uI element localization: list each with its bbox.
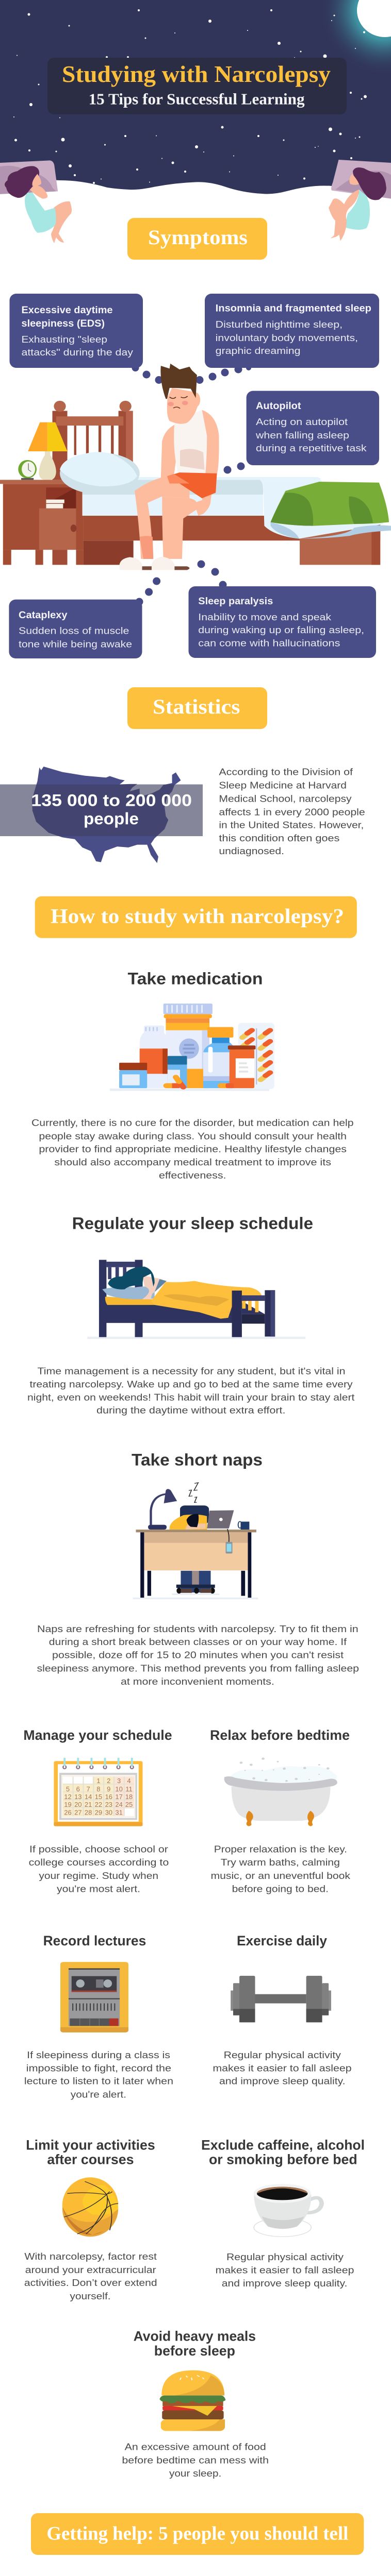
icon: calendar: 1 [96,1777,101,1785]
icon: calendar: 22 [95,1801,102,1808]
tip text: medication: Currently, there is no cure for the disorder, but medication can help [31,1117,354,1128]
illustration: medicine bottles [110,1004,274,1091]
tip title: limit activities: after courses [47,2151,134,2167]
callout: cataplexy: tone while being awake [19,638,132,649]
icon: tape recorder [60,1962,128,2032]
icon: calendar: 28 [85,1808,92,1817]
statistic band: 135 000 to 200 000 [31,791,192,810]
tip text: naps: during a short break between classes or on your way home. If [49,1636,347,1647]
tip title: relax before bedtime: Relax before bedtime [210,1727,350,1743]
heading: Statistics [127,687,267,729]
tip text: regulate sleep: night, even on weekends! This habit will train your brain to stay alert [27,1392,354,1403]
illustration: tired man on bed [0,364,391,570]
tip text: naps: possible, doze off for 15 to 20 minutes when you can't resist [52,1650,344,1660]
icon: dumbbell [231,1976,331,2022]
tip title: manage your schedule: Manage your schedule [23,1727,172,1743]
tip text: limit activities: With narcolepsy, factor rest [24,2251,157,2262]
tip text: relax [210,1844,351,1894]
statistics text: in the United States. However, [219,819,364,831]
tip text: regulate sleep [27,1365,354,1416]
icon: calendar [54,1758,143,1826]
icon: bathtub [224,1757,337,1826]
icon: calendar: 17 [115,1793,123,1801]
icon: calendar: 21 [85,1801,92,1808]
tip title: limit activities: Limit your activities [26,2137,155,2153]
tip text: record lectures [24,2049,173,2099]
callout: sleep paralysis: Inability to move and speak [198,612,332,622]
icon: calendar: 16 [105,1793,112,1801]
callout: sleep paralysis: Sleep paralysis [198,596,273,607]
statistics text: affects 1 in every 2000 people [219,807,365,817]
tip text: exercise [213,2049,352,2087]
tip text: exclude caffeine: and improve sleep quality. [222,2278,347,2289]
illustration: left sleeping girl [0,160,72,243]
thought bubble dots [132,364,251,606]
callout: insomnia: graphic dreaming [216,345,300,356]
callout: autopilot: Acting on autopilot [256,416,348,427]
icon: calendar: 6 [76,1785,80,1793]
tip text: limit activities: yourself. [70,2291,111,2301]
icon: calendar: 8 [96,1785,101,1793]
icon: calendar: 12 [64,1793,72,1801]
icon: calendar: 9 [107,1785,110,1793]
callout: autopilot: when falling asleep [255,430,349,440]
statistics text: According to the Division of [219,767,353,777]
callout: excessive daytime sleepiness: Excessive daytime [22,304,113,316]
callout: excessive daytime sleepiness: sleepiness (EDS) [22,318,105,329]
heading: getting help: Getting help: 5 people you should tell [46,2523,348,2544]
callout: insomnia [205,294,379,368]
tip text: record lectures: lecture to listen to it later when [24,2076,173,2087]
tip text: exclude caffeine [216,2251,354,2289]
callout: excessive daytime sleepiness [9,294,143,368]
tip text: record lectures: you're alert. [71,2089,126,2099]
heading: Symptoms: Symptoms [148,226,248,249]
callout: insomnia: Disturbed nighttime sleep, [216,319,343,330]
icon: burger [159,2370,225,2431]
icon: coffee cup [254,2184,322,2236]
icon: calendar: 19 [64,1801,72,1808]
header: night sky [0,0,391,194]
tip text: record lectures: If sleepiness during a class is [27,2049,170,2060]
tip text: limit activities: around your extracurricular [25,2264,156,2275]
tip text: exclude caffeine: Regular physical activity [226,2251,344,2262]
callout: sleep paralysis [189,586,376,658]
icon: calendar: 15 [95,1793,102,1801]
icon: calendar: 2 [107,1777,110,1785]
tip title: exclude caffeine: Exclude caffeine, alcohol [201,2137,365,2153]
callout: insomnia: involuntary body movements, [216,332,358,343]
tip text: medication: should also accompany medical treatment to improve its [54,1157,331,1167]
callout: autopilot: during a repetitive task [256,443,367,453]
illustration: right sleeping girl [329,160,391,241]
stars [13,9,367,184]
icon: calendar: 10 [115,1785,123,1793]
icon: calendar: 11 [125,1785,133,1793]
heading: Symptoms [127,218,267,260]
tip text: exercise: and improve sleep quality. [219,2076,346,2087]
icon: calendar: 3 [117,1777,121,1785]
heading: how to study: How to study with narcolepsy? [51,904,344,927]
icon: basketball [62,2177,118,2236]
tip text: avoid heavy meals: before bedtime can mess with [122,2454,269,2465]
icon: calendar: 14 [85,1793,92,1801]
title: Studying with Narcolepsy [62,61,331,87]
callout: autopilot: Autopilot [256,400,301,412]
icon: calendar: 31 [115,1808,123,1817]
tip text: manage schedule: your regime. Study when [39,1870,158,1881]
icon: calendar: 26 [64,1808,72,1817]
statistics text: Medical School, narcolepsy [219,793,352,804]
icon: calendar: 18 [125,1793,133,1801]
icon: calendar: 7 [86,1785,90,1793]
tip title: take medication: Take medication [128,969,263,988]
subtitle: 15 Tips for Successful Learning [89,90,305,108]
icon: calendar: 13 [74,1793,82,1801]
tip text: manage schedule: you're most alert. [57,1884,140,1894]
tip text: relax: Proper relaxation is the key. [214,1844,347,1855]
tip text: exclude caffeine: makes it easier to fall asleep [216,2265,354,2275]
moon [330,0,391,64]
icon: calendar: 20 [74,1801,82,1808]
tip text: exercise: makes it easier to fall asleep [213,2062,352,2073]
title panel [47,58,347,114]
icon: calendar: 25 [125,1801,133,1808]
statistic band [0,784,203,836]
tip text: naps [37,1623,359,1687]
statistics text: Sleep Medicine at Harvard [219,780,347,791]
tip title: exclude caffeine [201,2137,365,2167]
icon: calendar: 4 [127,1777,131,1785]
tip text: relax: Try warm baths, calming [221,1857,340,1868]
callout: excessive daytime sleepiness: Exhausting "sleep [22,334,107,345]
callout: autopilot [247,391,379,465]
tip text: manage schedule: college courses according to [29,1857,169,1868]
tip title: avoid heavy meals [134,2329,256,2359]
tip text: limit activities: activities. Don’t over extend [24,2277,157,2288]
callout: insomnia: Insomnia and fragmented sleep [216,303,371,314]
tip text: relax: music, or an uneventful book [210,1870,351,1881]
statistic band: people [84,809,139,828]
statistics text: undiagnosed. [219,845,284,856]
tip text: regulate sleep: treating narcolepsy. Wake up and go to bed at the same time every [30,1379,353,1389]
icon: calendar: 5 [66,1785,70,1793]
icon: calendar: 29 [95,1808,102,1817]
icon: calendar: 23 [105,1801,112,1808]
tip title: avoid heavy meals: Avoid heavy meals [134,2329,256,2344]
statistics text [219,767,365,856]
tip title: exclude caffeine: or smoking before bed [209,2151,357,2167]
tip text: limit activities [24,2251,157,2301]
heading: getting help [31,2513,364,2555]
tip text: avoid heavy meals: An excessive amount of food [125,2442,266,2452]
tip text: relax: before going to bed. [232,1884,329,1894]
heading: how to study [35,896,357,938]
heading: Statistics: Statistics [153,695,240,718]
illustration: woman sleeping in bed [87,1260,305,1339]
callout: excessive daytime sleepiness: attacks" during the day [22,347,134,358]
callout: sleep paralysis: during waking up or falling asleep, [198,624,364,635]
map: United States [32,767,181,863]
tip text: avoid heavy meals: your sleep. [169,2468,221,2479]
tip title: limit activities [26,2137,155,2167]
tip text: medication: people stay awake during class. You should consult your health [39,1130,347,1141]
tip text: naps: at more inconvenient moments. [121,1676,274,1687]
tip text: naps: Naps are refreshing for students with narcolepsy. Try to fit them in [37,1623,359,1634]
icon: calendar: 27 [74,1808,82,1817]
callout: cataplexy: Sudden loss of muscle [19,625,129,636]
tip text: regulate sleep: Time management is a necessity for any student, but it's vital in [37,1365,346,1377]
statistics text: this condition often goes [219,833,339,843]
tip text: manage schedule [29,1844,169,1894]
icon: calendar: 30 [105,1808,112,1817]
tip title: exercise daily: Exercise daily [237,1933,327,1948]
tip text: medication: effectiveness. [159,1170,226,1181]
tip text: record lectures: impossible to fight, record the [26,2062,171,2073]
tip text: medication: provider to find appropriate medicine. Healthy lifestyle changes [39,1143,347,1154]
tip text: manage schedule: If possible, choose school or [29,1844,168,1855]
tip title: record lectures: Record lectures [43,1933,146,1948]
tip text: exercise: Regular physical activity [224,2049,341,2060]
tip text: avoid heavy meals [122,2442,269,2479]
tip text: regulate sleep: during the daytime without extra effort. [96,1405,286,1416]
callout: sleep paralysis: can come with hallucinations [198,638,340,649]
tip text: naps: sleepiness anymore. This method prevents you from falling asleep [37,1663,359,1674]
callout: cataplexy: Cataplexy [19,609,68,621]
tip text: medication [31,1117,354,1181]
icon: calendar: 24 [115,1801,123,1808]
tip title: avoid heavy meals: before sleep [154,2343,235,2359]
callout: cataplexy [9,600,142,658]
tip title: take short naps: Take short naps [132,1451,263,1469]
illustration: student asleep at desk [133,1483,258,1599]
tip title: regulate sleep: Regulate your sleep schedule [72,1214,313,1233]
